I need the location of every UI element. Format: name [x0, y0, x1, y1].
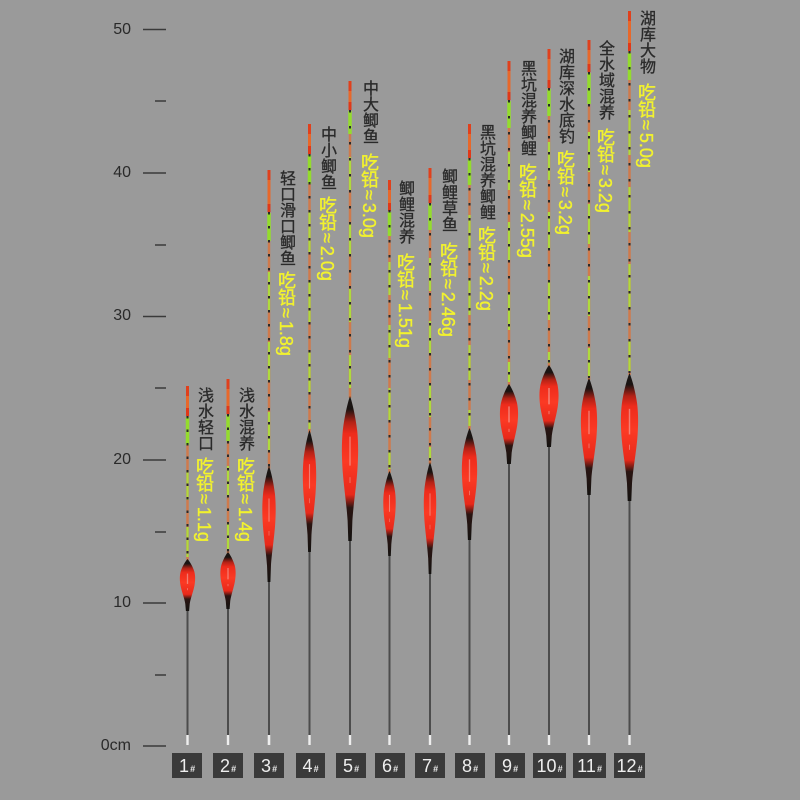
- label float 1: [194, 387, 214, 542]
- float 6: [383, 180, 396, 745]
- number badge 5: [336, 753, 366, 778]
- number badge 7: [415, 753, 445, 778]
- number badge 3: 3#: [261, 756, 277, 776]
- float 4: [303, 124, 316, 745]
- label float 11: [594, 40, 615, 213]
- label float 4: [316, 126, 337, 281]
- text: 中小鲫鱼: [318, 126, 335, 190]
- text: 吃铅 ≈ 3.2g: [595, 128, 615, 213]
- number badge 12: [614, 753, 645, 778]
- text: 浅水轻口: [195, 387, 212, 451]
- axis label 40: 40: [113, 164, 131, 181]
- number badge 2: [213, 753, 243, 778]
- number badge 9: [495, 753, 525, 778]
- text: 鲫鲤草鱼: [439, 168, 456, 232]
- number badge 8: [455, 753, 485, 778]
- text: 吃铅 ≈ 1.1g: [194, 457, 214, 542]
- text: 吃铅 ≈ 2.0g: [317, 196, 337, 281]
- float 9: [500, 61, 518, 745]
- label float 10: [554, 48, 575, 235]
- number badge 11: 11#: [577, 756, 602, 776]
- axis label 30: 30: [113, 307, 131, 324]
- text: 吃铅 ≈ 2.46g: [438, 242, 458, 337]
- text: 吃铅 ≈ 2.55g: [517, 163, 537, 258]
- number badge 3: [254, 753, 284, 778]
- float 10: [539, 49, 559, 745]
- number badge 6: [375, 753, 405, 778]
- text: 黑坑混养鲫鲤: [518, 60, 535, 156]
- number badge 5: 5#: [343, 756, 359, 776]
- text: 黑坑混养鲫鲤: [477, 124, 494, 220]
- text: 湖库深水底钓: [556, 48, 573, 144]
- text: 鲫鲤混养: [396, 180, 413, 244]
- text: 湖库大物: [637, 10, 654, 74]
- axis label 10: 10: [113, 594, 131, 611]
- number badge 7: 7#: [422, 756, 438, 776]
- text: 吃铅 ≈ 3.0g: [359, 153, 379, 238]
- number badge 1: 1#: [179, 756, 195, 776]
- number badge 10: 10#: [536, 756, 563, 776]
- number badge 10: [533, 753, 566, 778]
- number badge 4: 4#: [302, 756, 319, 776]
- scale axis ticks: [143, 30, 166, 746]
- float 5: [342, 81, 358, 745]
- number badge 11: [573, 753, 606, 778]
- text: 吃铅 ≈ 1.4g: [235, 457, 255, 542]
- axis label 0cm: 0cm: [101, 737, 131, 754]
- text: 浅水混养: [236, 387, 253, 451]
- label float 3: [276, 170, 296, 356]
- number badge 2: 2#: [220, 756, 236, 776]
- label float 6: [394, 180, 415, 348]
- text: 中大鲫鱼: [360, 80, 377, 144]
- float 7: [424, 168, 436, 745]
- text: 全水域混养: [596, 40, 613, 120]
- text: 吃铅 ≈ 1.51g: [395, 253, 415, 348]
- text: 吃铅 ≈ 3.2g: [555, 150, 575, 235]
- float 1: [180, 386, 195, 745]
- float 8: [462, 124, 477, 745]
- float 12: [621, 11, 638, 745]
- label float 9: [516, 60, 537, 258]
- label float 8: [476, 124, 496, 311]
- float 3: [262, 170, 276, 745]
- label float 5: [358, 80, 379, 238]
- number badge 6: 6#: [382, 756, 398, 776]
- float 11: [581, 40, 597, 745]
- number badge 1: [172, 753, 202, 778]
- text: 吃铅 ≈ 1.8g: [276, 271, 296, 356]
- label float 12: [636, 10, 656, 168]
- number badge 8: 8#: [462, 756, 478, 776]
- text: 吃铅 ≈ 5.0g: [636, 83, 656, 168]
- label float 7: [438, 168, 458, 337]
- float 2: [220, 379, 236, 745]
- text: 轻口滑口鲫鱼: [277, 170, 294, 266]
- number badge 9: 9#: [502, 756, 518, 776]
- label float 2: [234, 387, 255, 542]
- text: 吃铅 ≈ 2.2g: [476, 226, 496, 311]
- number badge 12: 12#: [616, 756, 643, 776]
- axis label 20: 20: [113, 451, 131, 468]
- number badge 4: [296, 753, 325, 778]
- axis label 50: 50: [113, 21, 131, 38]
